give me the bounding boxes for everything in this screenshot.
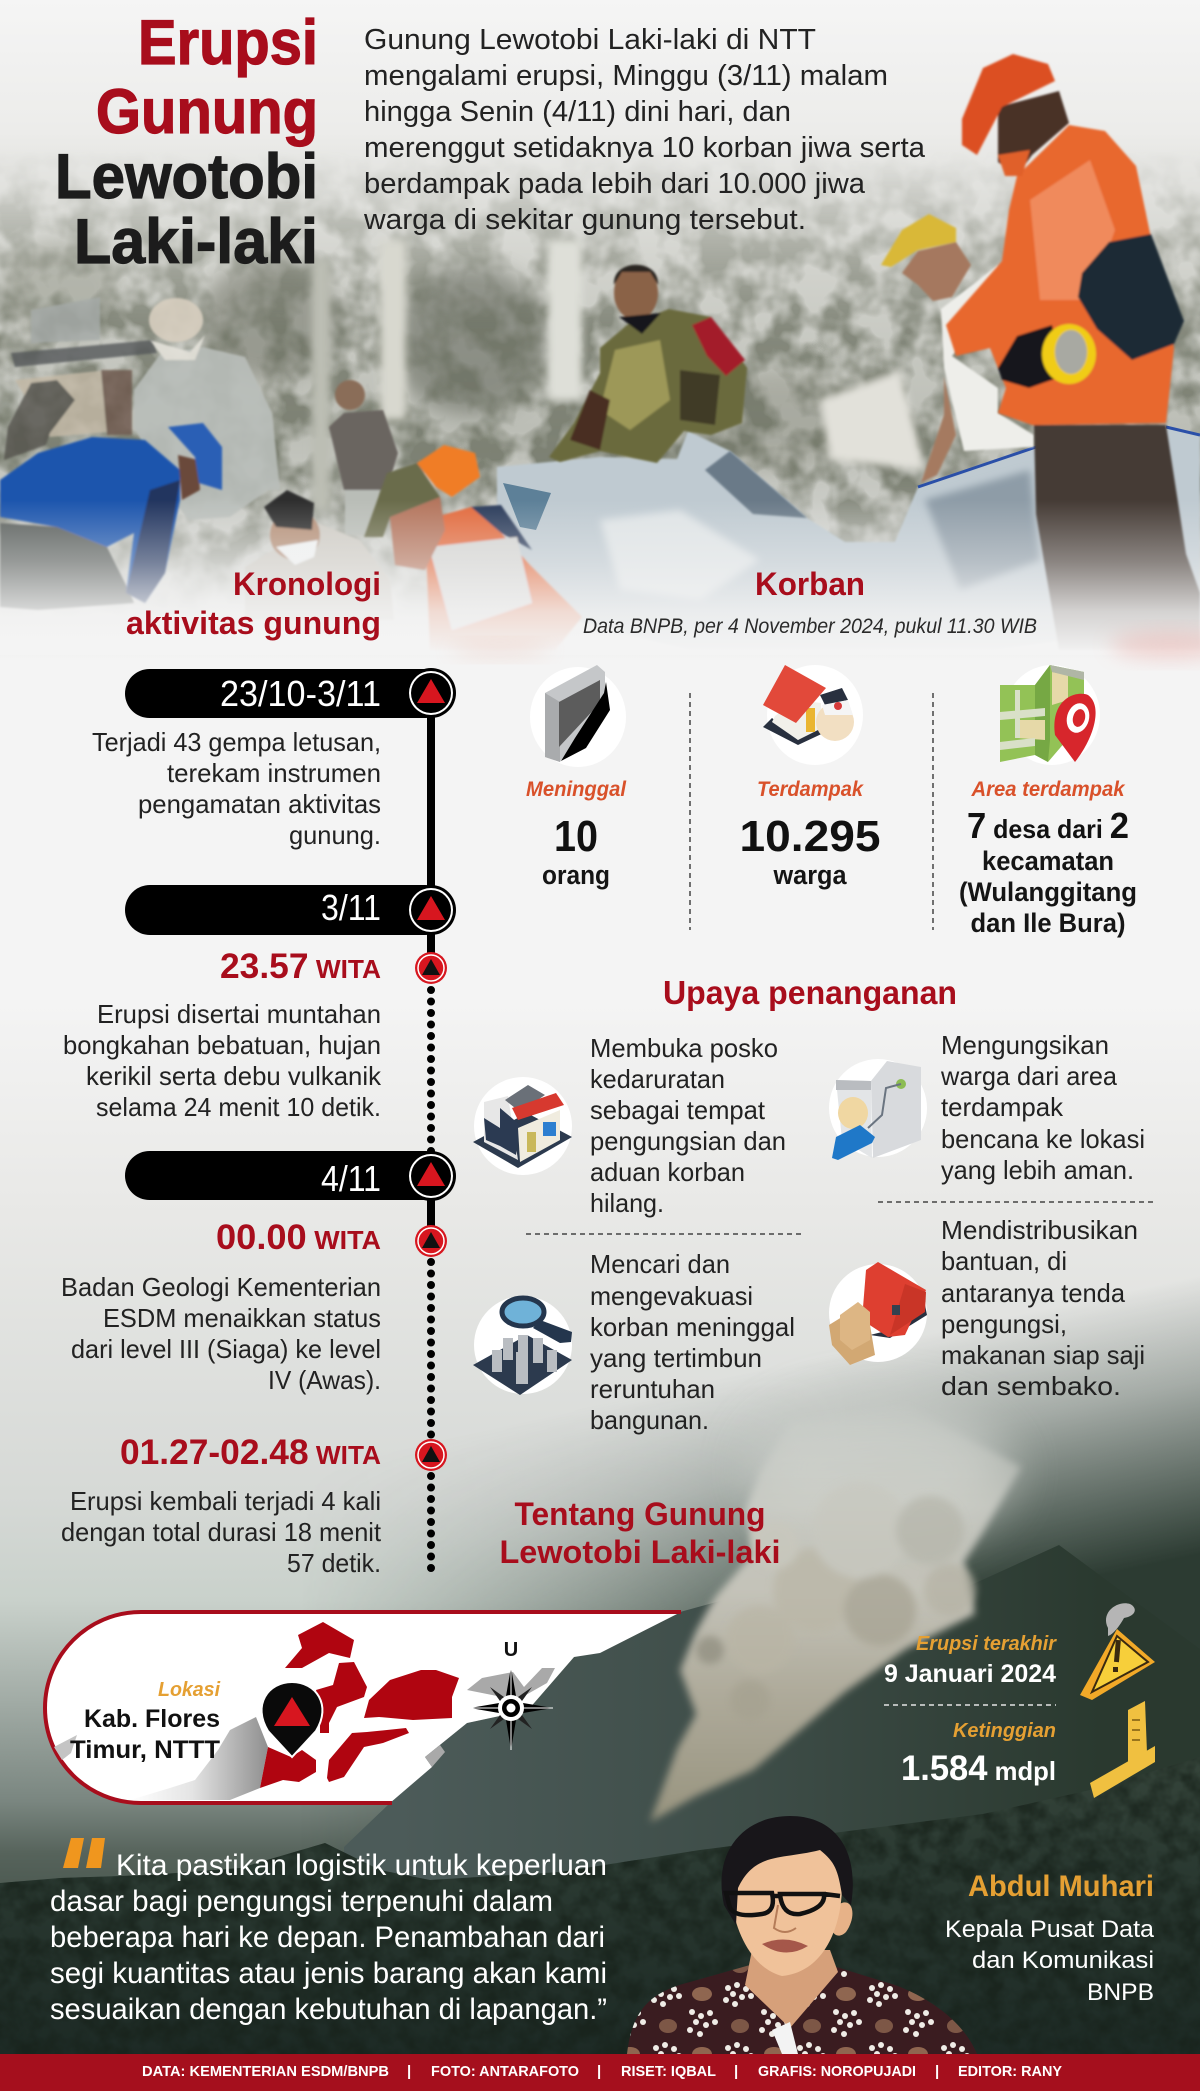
- icon: house with heart: [763, 665, 863, 765]
- erupsi terakhir: [884, 1633, 1057, 1688]
- title: [55, 8, 318, 277]
- text: mencari: mengevakuasi: [590, 1281, 753, 1311]
- panel: mountain facts: [884, 1603, 1155, 1798]
- text: mencari: korban meninggal: [590, 1312, 795, 1342]
- text: distribusi: Mendistribusikan: [941, 1215, 1138, 1245]
- quote: segi kuantitas atau jenis barang akan kami: [50, 1957, 607, 1990]
- blue shirt worker: [0, 423, 222, 610]
- tarp: [497, 427, 1200, 650]
- event text 3: ESDM menaikkan status: [103, 1303, 381, 1333]
- event text 4: Erupsi kembali terjadi 4 kali: [70, 1486, 381, 1516]
- footer credits: FOTO: ANTARAFOTO: [431, 2063, 579, 2080]
- icon: black ribbon frame: [530, 665, 626, 767]
- event text 2: bongkahan bebatuan, hujan: [63, 1030, 381, 1060]
- speaker name: dan Komunikasi: [972, 1947, 1154, 1974]
- text: distribusi: dan sembako.: [941, 1371, 1121, 1401]
- man in yellow hat: [881, 214, 1034, 483]
- fade to page: [0, 500, 1200, 659]
- workers with orange and olive caps: [364, 445, 582, 650]
- text: mencari: [590, 1249, 795, 1435]
- text: mengungsikan: yang lebih aman.: [941, 1155, 1134, 1185]
- volcanic smoke plume: [650, 1400, 1021, 1822]
- heading: tentang gunung: [500, 1496, 780, 1570]
- area terdampak stat: (Wulanggitang: [959, 877, 1137, 907]
- panel: upaya penanganan: [473, 1030, 1154, 1435]
- text: posko: Membuka posko: [590, 1033, 778, 1063]
- mountain and forest photo: [0, 1545, 1200, 2054]
- panel: korban stats: [526, 665, 1137, 938]
- meninggal stat: 10: [554, 812, 598, 861]
- text: posko: [590, 1033, 786, 1218]
- text: mencari: Mencari dan: [590, 1249, 730, 1279]
- heading: korban: Data BNPB, per 4 November 2024, pukul 11.30 WIB: [583, 615, 1037, 638]
- event text 2: kerikil serta debu vulkanik: [86, 1061, 382, 1091]
- heading: kronologi: [126, 566, 381, 641]
- location text: Timur, NTTT: [70, 1736, 220, 1764]
- terdampak stat: Terdampak: [757, 778, 864, 801]
- intro text: Gunung Lewotobi Laki-laki di NTT: [364, 24, 816, 56]
- intro text: merenggut setidaknya 10 korban jiwa serta: [364, 132, 926, 164]
- footer credits: RISET: IQBAL: [621, 2063, 716, 2080]
- speaker name: BNPB: [1087, 1979, 1154, 2006]
- location text: Kab. Flores: [84, 1705, 220, 1733]
- heading: korban: [583, 566, 1037, 638]
- footer credits: EDITOR: RANY: [958, 2063, 1062, 2080]
- portrait: Abdul Muhari: [627, 1816, 977, 2054]
- intro text: berdampak pada lebih dari 10.000 jiwa: [364, 168, 866, 200]
- text: mencari: reruntuhan: [590, 1374, 715, 1404]
- timeline: [61, 668, 456, 1578]
- date pill 23/10-3/11: [125, 668, 456, 718]
- area terdampak stat: 7 desa dari 2: [967, 805, 1129, 846]
- pin: [262, 1682, 322, 1757]
- man in brown shirt: [329, 380, 398, 535]
- title: Laki-laki: [74, 207, 318, 277]
- heading: kronologi: aktivitas gunung: [126, 605, 381, 641]
- crouching worker with mask: [245, 490, 394, 620]
- footer credits: |: [935, 2063, 939, 2080]
- icon: search and rescue: [473, 1296, 572, 1395]
- intro text: warga di sekitar gunung tersebut.: [363, 204, 806, 236]
- location text: Lokasi: [158, 1679, 220, 1701]
- event text 3: dari level III (Siaga) ke level: [71, 1334, 381, 1364]
- area terdampak stat: [959, 778, 1137, 938]
- text: distribusi: makanan siap saji: [941, 1340, 1145, 1370]
- panel: location map: [45, 1612, 681, 1803]
- text: posko: sebagai tempat: [590, 1095, 766, 1125]
- event text 4: 57 detik.: [287, 1548, 381, 1578]
- title: Lewotobi: [55, 142, 318, 212]
- icon: quotation mark: [63, 1838, 105, 1868]
- timeline line: [427, 693, 435, 1578]
- shed in background: [4, 297, 157, 460]
- soldier: [549, 265, 747, 463]
- text: mengungsikan: [940, 1030, 1145, 1185]
- text: distribusi: [941, 1215, 1145, 1401]
- area terdampak stat: kecamatan: [982, 846, 1114, 876]
- text: mencari: bangunan.: [590, 1405, 709, 1435]
- event text 3: Badan Geologi Kementerian: [61, 1272, 381, 1302]
- ketinggian: Ketinggian: [953, 1720, 1056, 1742]
- erupsi terakhir: 9 Januari 2024: [884, 1660, 1056, 1688]
- icon: map with pin: [1000, 665, 1100, 765]
- event text 1: Terjadi 43 gempa letusan,: [92, 727, 381, 757]
- meninggal stat: orang: [542, 860, 610, 890]
- intro text: [363, 24, 926, 236]
- text: mengungsikan: warga dari area: [940, 1061, 1118, 1091]
- terdampak stat: [740, 778, 880, 890]
- event text 3: IV (Awas).: [268, 1365, 381, 1395]
- ketinggian: 1.584 mdpl: [901, 1749, 1056, 1788]
- divider: [689, 693, 691, 930]
- event text 1: gunung.: [289, 820, 381, 850]
- location text: [70, 1679, 220, 1764]
- footer credits: |: [597, 2063, 601, 2080]
- icon: ruler: [1090, 1701, 1155, 1798]
- event text 2: Erupsi disertai muntahan: [97, 999, 381, 1029]
- quote: sesuaikan dengan kebutuhan di lapangan.”: [50, 1993, 607, 2026]
- intro text: mengalami erupsi, Minggu (3/11) malam: [364, 60, 888, 92]
- speaker name: Abdul Muhari: [968, 1870, 1154, 1903]
- event text 2: [63, 999, 382, 1122]
- time 00.00: 00.00 WITA: [216, 1218, 381, 1257]
- text: mengungsikan: terdampak: [941, 1092, 1064, 1122]
- map: red districts: [260, 1622, 459, 1788]
- text: posko: hilang.: [590, 1188, 664, 1218]
- text: distribusi: pengungsi,: [941, 1309, 1067, 1339]
- heading: tentang gunung: Tentang Gunung: [514, 1496, 766, 1532]
- man in grey shirt: [134, 298, 280, 520]
- event text 1: pengamatan aktivitas: [138, 789, 381, 819]
- time 23.57: 23.57 WITA: [220, 947, 381, 986]
- date pill 3/11: 3/11: [321, 887, 381, 928]
- icon: shop: [473, 1077, 572, 1175]
- event text 2: selama 24 menit 10 detik.: [96, 1092, 381, 1122]
- heading: kronologi: Kronologi: [233, 566, 381, 602]
- text: mengungsikan: Mengungsikan: [941, 1030, 1109, 1060]
- icon: warning triangle: [1080, 1603, 1155, 1700]
- intro text: hingga Senin (4/11) dini hari, dan: [364, 96, 791, 128]
- meninggal stat: Meninggal: [526, 778, 627, 801]
- date pill 3/11: [125, 885, 456, 935]
- footer credits: [0, 2054, 1200, 2091]
- icon: person evacuating: [829, 1059, 927, 1160]
- map: grey land: [54, 1668, 555, 1800]
- event text 4: dengan total durasi 18 menit: [61, 1517, 382, 1547]
- compass: [470, 1639, 553, 1750]
- quote: Kita pastikan logistik untuk keperluan: [116, 1849, 607, 1882]
- event text 1: [92, 727, 381, 850]
- area terdampak stat: Area terdampak: [971, 778, 1126, 801]
- terdampak stat: warga: [773, 860, 847, 890]
- time 01.27-02.48: 01.27-02.48 WITA: [120, 1433, 381, 1472]
- event text 1: terekam instrumen: [167, 758, 381, 788]
- speaker name: [945, 1870, 1155, 2006]
- heading: tentang gunung: Lewotobi Laki-laki: [500, 1534, 780, 1570]
- compass: U: [504, 1639, 518, 1661]
- date pill 4/11: 4/11: [321, 1158, 381, 1199]
- title: Erupsi: [138, 8, 318, 78]
- text: distribusi: antaranya tenda: [941, 1278, 1126, 1308]
- date pill 4/11: [125, 1151, 456, 1201]
- date pill 23/10-3/11: 23/10-3/11: [220, 673, 381, 714]
- speaker name: Kepala Pusat Data: [945, 1916, 1155, 1943]
- divider: [932, 693, 934, 930]
- area terdampak stat: dan Ile Bura): [970, 908, 1126, 938]
- text: distribusi: bantuan, di: [941, 1246, 1067, 1276]
- quote: dasar bagi pengungsi terpenuhi dalam: [50, 1885, 553, 1918]
- heading: korban: Korban: [755, 566, 865, 602]
- man in orange with bag and lamp: [946, 54, 1200, 650]
- quote: [50, 1838, 607, 2026]
- footer credits: |: [734, 2063, 738, 2080]
- footer credits: GRAFIS: NOROPUJADI: [758, 2063, 916, 2080]
- heading: upaya penanganan: Upaya penanganan: [663, 974, 957, 1011]
- meninggal stat: [526, 778, 627, 890]
- erupsi terakhir: Erupsi terakhir: [916, 1633, 1057, 1655]
- footer credits: DATA: KEMENTERIAN ESDM/BNPB: [142, 2063, 389, 2080]
- text: posko: pengungsian dan: [590, 1126, 786, 1156]
- ketinggian: [901, 1720, 1056, 1788]
- event text 4: [61, 1486, 382, 1578]
- terdampak stat: 10.295: [740, 812, 880, 861]
- title: Gunung: [96, 77, 318, 147]
- icon: tent and boxes: [829, 1262, 927, 1365]
- event text 3: [61, 1272, 381, 1395]
- text: posko: aduan korban: [590, 1157, 745, 1187]
- photo: rescue workers and tarp: [0, 54, 1200, 659]
- text: mencari: yang tertimbun: [590, 1343, 762, 1373]
- quote: beberapa hari ke depan. Penambahan dari: [50, 1921, 605, 1954]
- text: mengungsikan: bencana ke lokasi: [941, 1124, 1145, 1154]
- footer credits: |: [407, 2063, 411, 2080]
- text: posko: kedaruratan: [590, 1064, 725, 1094]
